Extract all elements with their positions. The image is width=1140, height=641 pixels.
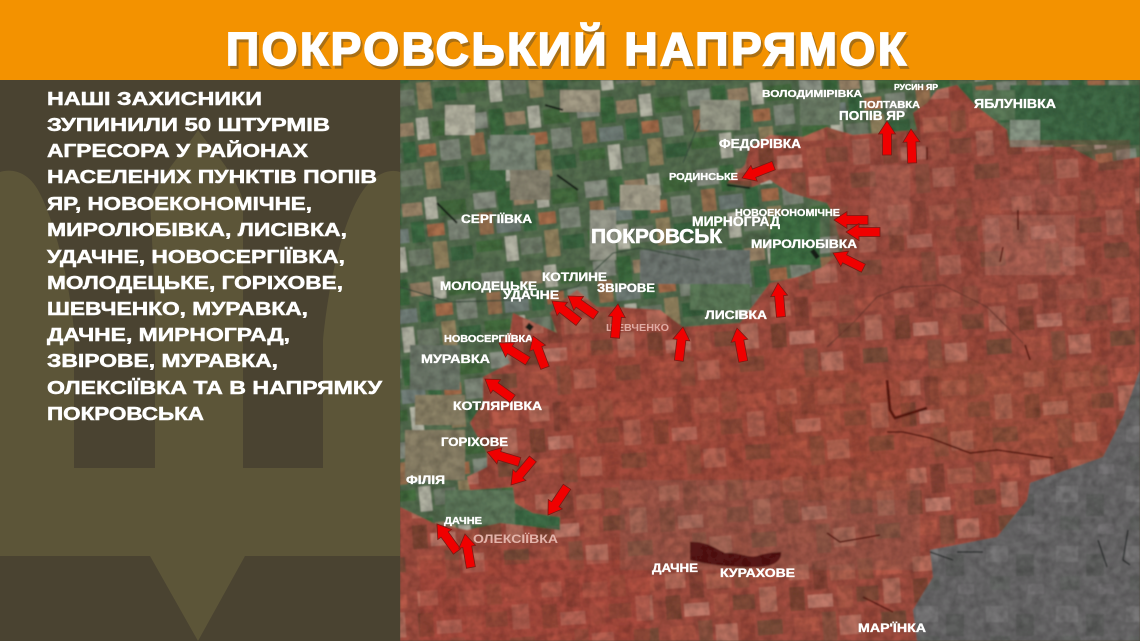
map labels: УДАЧНЕ	[503, 288, 559, 302]
map labels: МОЛОДЕЦЬКЕ	[440, 279, 537, 293]
extra fields in free territory	[405, 85, 1140, 526]
occupied tones	[420, 140, 1130, 641]
mottling	[400, 80, 1140, 641]
map labels: ПОКРОВСЬК	[591, 226, 723, 248]
occupied territory (red)	[400, 85, 1140, 641]
text block: summary: МИРОЛЮБІВКА, ЛИСІВКА,	[47, 220, 347, 240]
text block: summary: ПОКРОВСЬКА	[47, 404, 204, 424]
reservoir	[690, 542, 781, 567]
map labels: КУРАХОВЕ	[720, 566, 795, 580]
map labels: ЯБЛУНІВКА	[974, 96, 1057, 111]
map labels: ДАЧНЕ	[444, 516, 482, 527]
text block: summary	[47, 89, 383, 424]
panel: satellite map	[400, 80, 1140, 641]
text block: summary: НАШІ ЗАХИСНИКИ	[47, 89, 262, 109]
text block: summary: ЗВІРОВЕ, МУРАВКА,	[47, 351, 278, 371]
water and ravines	[827, 147, 1053, 612]
ponds in free territory	[437, 105, 818, 329]
red attack arrows	[430, 121, 921, 569]
map labels: ЗВІРОВЕ	[597, 281, 655, 295]
title banner	[0, 0, 1140, 80]
map labels: ЛИСІВКА	[705, 308, 767, 322]
map labels: СЕРГІЇВКА	[461, 211, 532, 226]
map terrain	[400, 80, 1140, 641]
trident emblem	[0, 130, 400, 641]
map labels: НОВОСЕРГІЇВКА	[444, 332, 533, 345]
map labels: МАР'ЇНКА	[858, 620, 926, 635]
map labels: ОЛЕКСІЇВКА	[473, 531, 558, 546]
map labels: ПОЛТАВКА	[859, 99, 920, 111]
grey city ravines	[930, 530, 1130, 567]
grey city area	[913, 370, 1140, 641]
map labels: КОТЛИНЕ	[542, 270, 607, 284]
map labels: ВОЛОДИМІРІВКА	[762, 88, 862, 100]
map labels: КОТЛЯРІВКА	[453, 399, 542, 413]
text block: summary: МОЛОДЕЦЬКЕ, ГОРІХОВЕ,	[47, 273, 343, 293]
map labels: РУСИН ЯР	[894, 83, 939, 92]
map labels: МУРАВКА	[421, 352, 490, 366]
map labels: ФЕДОРІВКА	[719, 137, 801, 151]
map labels: ДАЧНЕ	[652, 561, 698, 575]
map labels	[406, 83, 1057, 635]
text block: summary: ЯР, НОВОЕКОНОМІЧНЕ,	[47, 194, 312, 214]
panel: left text panel	[0, 80, 400, 641]
map labels: ПОПІВ ЯР	[839, 108, 905, 123]
map labels: НОВОЕКОНОМІЧНЕ	[735, 207, 840, 219]
text block: summary: ОЛЕКСІЇВКА ТА В НАПРЯМКУ	[47, 378, 383, 398]
map labels: МИРНОГРАД	[692, 214, 780, 229]
text block: summary: АГРЕСОРА У РАЙОНАХ	[47, 140, 308, 161]
map labels: МИРОЛЮБІВКА	[751, 237, 857, 251]
roads	[400, 120, 1023, 347]
title: ПОКРОВСЬКИЙ НАПРЯМОК	[226, 23, 907, 75]
text block: summary: ШЕВЧЕНКО, МУРАВКА,	[47, 299, 308, 319]
text block: summary: ДАЧНЕ, МИРНОГРАД,	[47, 325, 290, 345]
text block: summary: ЗУПИНИЛИ 50 ШТУРМІВ	[47, 115, 330, 135]
text block: summary: УДАЧНЕ, НОВОСЕРГІЇВКА,	[47, 247, 345, 267]
text block: summary: НАСЕЛЕНИХ ПУНКТІВ ПОПІВ	[47, 167, 377, 187]
title banner: ПОКРОВСЬКИЙ НАПРЯМОК	[228, 26, 909, 78]
map labels: РОДИНСЬКЕ	[669, 171, 738, 183]
map labels: ГОРІХОВЕ	[441, 435, 508, 449]
map labels: ШЕВЧЕНКО	[606, 322, 669, 334]
map labels: ФІЛІЯ	[406, 473, 445, 487]
